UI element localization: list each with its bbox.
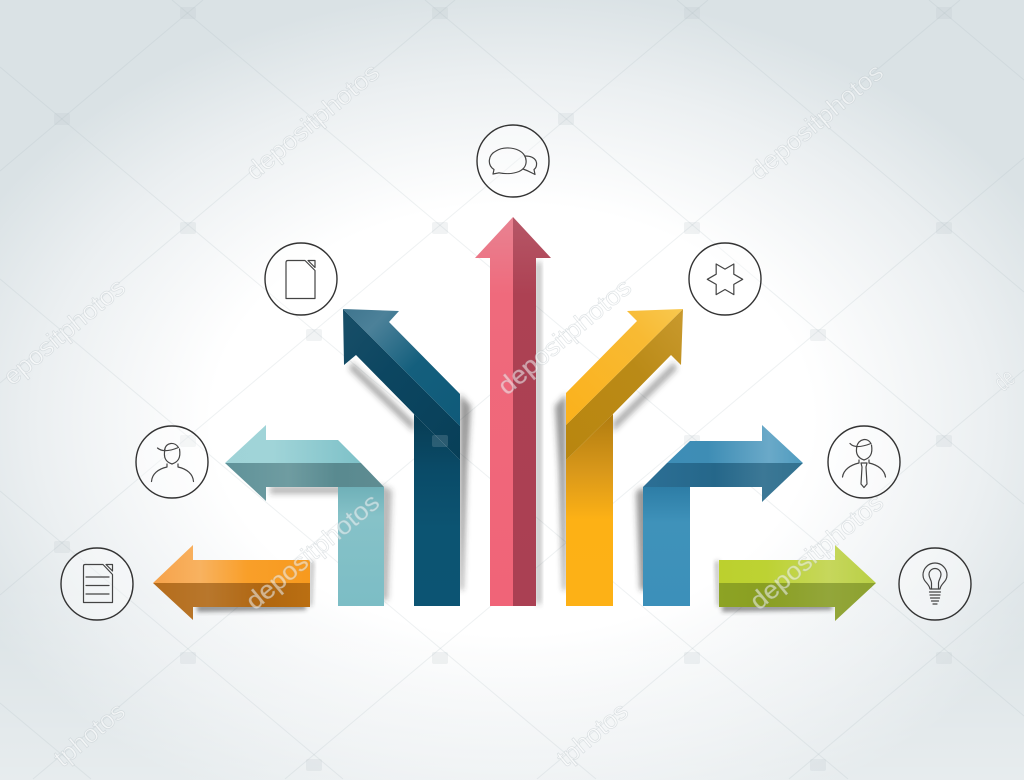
icon: six-pointed star bbox=[689, 243, 761, 315]
icon: light bulb bbox=[899, 548, 971, 620]
watermark text: depositphotos bbox=[241, 58, 385, 186]
watermark text: tphotos bbox=[49, 697, 131, 773]
watermark text: depositphotos bbox=[745, 488, 889, 616]
watermark text: depositphotos bbox=[745, 58, 889, 186]
arrow: navy up-left bbox=[343, 309, 471, 606]
icon: person with tie bbox=[828, 426, 900, 498]
watermark text: tphotos bbox=[552, 697, 634, 773]
watermark text: depositphotos bbox=[241, 488, 385, 616]
camera mark on navy stem bbox=[432, 435, 448, 447]
arrow: blue right-turn bbox=[636, 425, 803, 606]
arrow: yellow up-right bbox=[555, 309, 683, 606]
icon: text document bbox=[61, 548, 133, 620]
arrow: orange left bbox=[153, 545, 314, 620]
arrow: red up bbox=[475, 217, 551, 606]
icon: person with cap bbox=[136, 426, 208, 498]
icon: speech bubbles bbox=[477, 125, 549, 197]
arrow: green right bbox=[715, 545, 876, 621]
arrow: teal left-turn bbox=[225, 425, 392, 606]
watermark text: depositphotos bbox=[493, 273, 637, 401]
icon: blank document bbox=[265, 243, 337, 315]
watermark text: epositphotos bbox=[0, 273, 131, 391]
